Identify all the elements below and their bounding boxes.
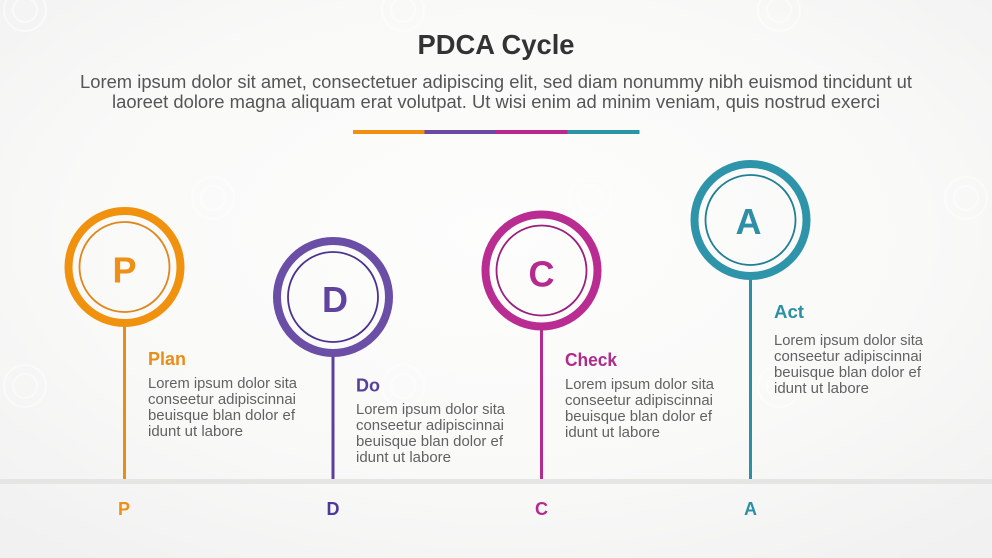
panel: do [277,241,506,519]
heading: Plan: Plan [148,348,186,369]
text: act description: idunt ut labore [774,381,869,397]
text: do description: Lorem ipsum dolor sita [356,402,506,418]
text: do description: idunt ut labore [356,450,451,466]
icon: C circle [486,214,598,326]
icon: P circle: P [112,250,137,290]
text: check description: beuisque blan dolor ef [565,409,713,425]
icon: P circle [68,211,180,323]
text: plan description: idunt ut labore [148,424,243,440]
text: check description: idunt ut labore [565,425,660,441]
subtitle text: laoreet dolore magna aliquam erat volutpat. Ut wisi enim ad minim veniam, quis nostrud exerci [112,91,880,112]
title divider bar [353,130,640,134]
footer letter: C: C [535,499,548,519]
text: act description [774,333,924,397]
title: PDCA Cycle [418,29,574,60]
icon: C circle: C [528,254,554,294]
text: do description: beuisque blan dolor ef [356,434,504,450]
text: plan description [148,376,298,440]
footer letter: A: A [744,499,757,519]
footer letter: D: D [326,499,340,519]
text: check description: conseetur adipiscinnai [565,393,713,409]
panel: plan [68,211,298,519]
stem: do [332,356,334,479]
stem: act [749,279,752,479]
subtitle text: Lorem ipsum dolor sit amet, consectetuer adipiscing elit, sed diam nonummy nibh euismod tincidunt ut [80,71,912,92]
text: check description [565,377,715,441]
text: act description: Lorem ipsum dolor sita [774,333,924,349]
text: do description: conseetur adipiscinnai [356,418,504,434]
text: act description: conseetur adipiscinnai [774,349,922,365]
text: plan description: conseetur adipiscinnai [148,392,296,408]
stem: plan [123,326,126,479]
panel: check [486,214,715,519]
text: act description: beuisque blan dolor ef [774,365,922,381]
text: check description: Lorem ipsum dolor sita [565,377,715,393]
heading: Act: Act [774,301,804,322]
heading: Do: Do [356,374,380,396]
baseline band [0,479,992,484]
subtitle text [80,71,912,112]
icon: D circle: D [322,279,348,320]
text: plan description: beuisque blan dolor ef [148,408,296,424]
stem: check [540,329,543,479]
text: plan description: Lorem ipsum dolor sita [148,376,298,392]
icon: A circle [694,164,806,276]
text: do description [356,402,506,466]
footer letter: P: P [118,499,130,519]
heading: Check: Check [565,349,618,370]
icon: D circle [277,241,389,353]
panel: act [694,164,924,519]
icon: A circle: A [736,201,762,242]
